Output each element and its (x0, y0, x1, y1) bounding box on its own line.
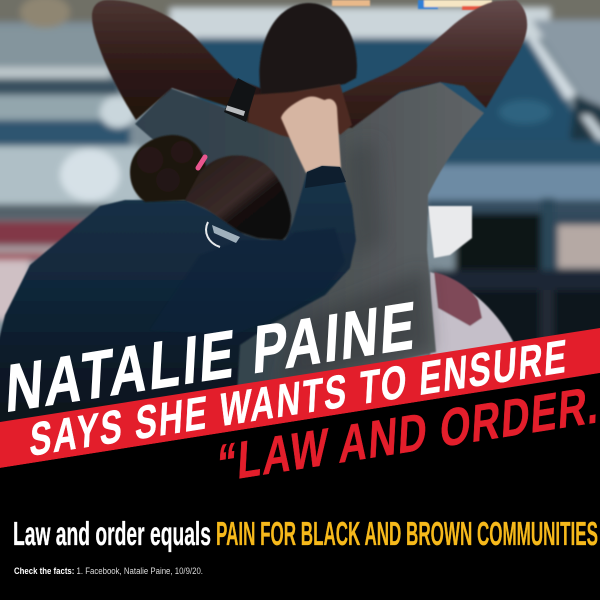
right arm (330, 0, 527, 128)
wristwatch (224, 78, 256, 122)
white statement: Law and order equals (13, 515, 211, 552)
red car hood right (430, 272, 515, 362)
jacket (0, 166, 356, 430)
woman officer (0, 97, 356, 430)
headline: Natalie Paine: NATALIE PAINE (4, 287, 417, 427)
hands of man (248, 84, 352, 140)
head (259, 3, 357, 100)
black lower panel (0, 373, 600, 600)
man in grey shirt (92, 0, 527, 395)
hair bun (130, 135, 206, 202)
jacket patch (206, 222, 240, 247)
white truck light (428, 206, 472, 258)
banner text: SAYS SHE WANTS TO ENSURE (28, 329, 568, 466)
left arm (92, 0, 292, 132)
police light bar (332, 0, 492, 10)
pink hair tie (198, 157, 205, 168)
sleeve shadow (150, 228, 345, 335)
shirt fold shadows (280, 140, 432, 385)
red banner (0, 328, 600, 468)
hair (185, 155, 291, 240)
cuff (305, 166, 346, 188)
hand (281, 97, 341, 173)
footnote: Check the facts: 1. Facebook, Natalie Paine, 10/9/20. (14, 566, 203, 576)
shirt (135, 82, 484, 395)
